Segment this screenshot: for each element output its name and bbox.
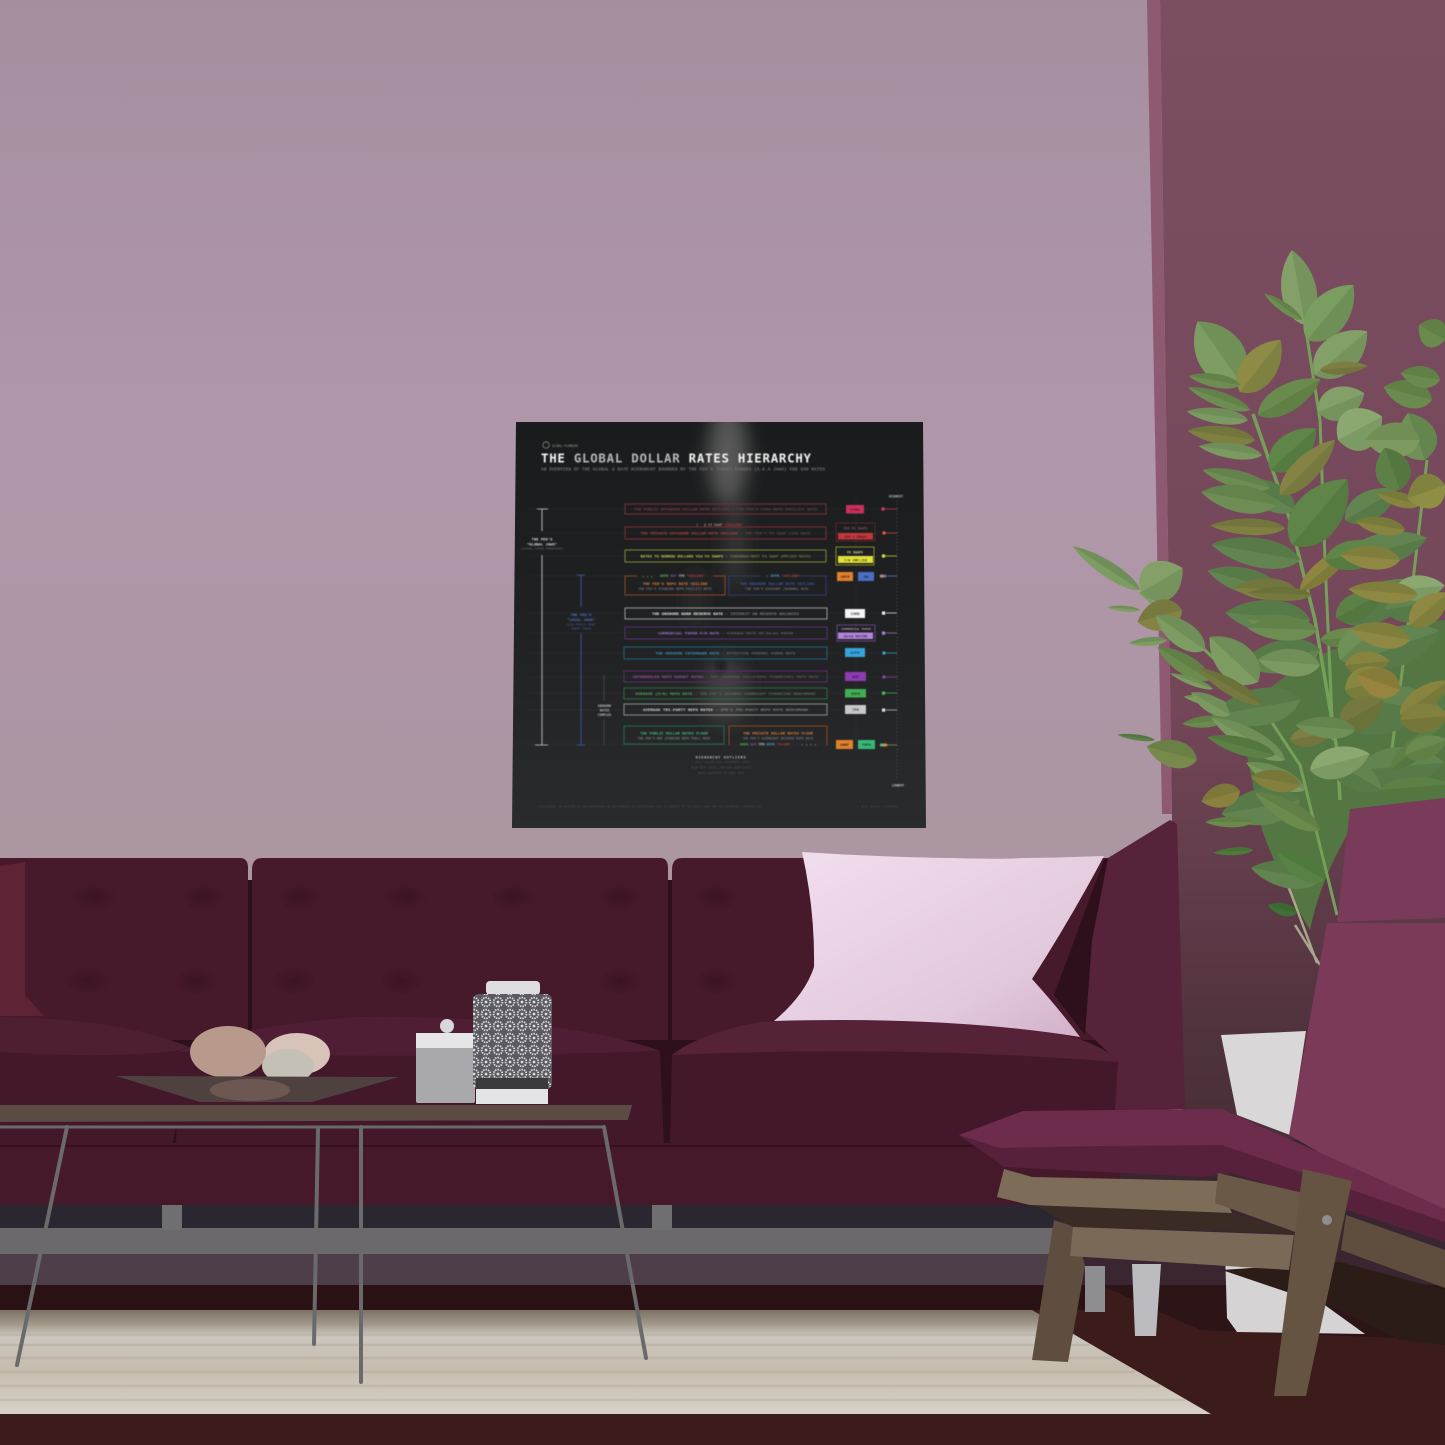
Fed's local jaws bracket: THE FED'S	[570, 613, 592, 618]
lowest marker	[892, 784, 904, 792]
plant: back leaves	[1204, 468, 1445, 893]
title: THE GLOBAL DOLLAR RATES HIERARCHY	[541, 450, 812, 466]
poster smoke	[687, 405, 748, 724]
row: interdealer repo: INTERDEALER REPO MARKET RATES - GCF (GENERAL COLLATERAL FINANCING) REPO RATE	[632, 675, 819, 680]
plant: top cluster leaves	[1178, 247, 1400, 739]
logo: GLOBAL PLUMBING	[552, 444, 578, 448]
chips: ONRP and FRPR: FRPR	[862, 744, 872, 748]
onshore rates complex bracket: RATES	[600, 708, 609, 712]
row: private dollar rates floor: ⇣ ⇣ ⇣ ⇣	[801, 744, 816, 748]
row: private offshore ceiling: $ FX SWAP "CEILING"	[704, 523, 743, 528]
sofa	[0, 820, 1185, 1205]
poster smoke dark spot	[717, 660, 725, 672]
coffee table decor	[116, 981, 552, 1104]
decor: coral balls	[264, 1033, 330, 1075]
row: onshore dollar rate ceiling: THE FED'S DISCOUNT (WINDOW) RATE	[745, 587, 809, 591]
sofa: base	[0, 1143, 1120, 1205]
highest marker	[889, 490, 903, 500]
Fed's global jaws bracket: THE FED'S	[531, 538, 553, 542]
chair: underside shadow	[1035, 1205, 1298, 1233]
poster content	[520, 442, 904, 808]
hierarchy outliers: TERM REPO RATES, PRIVATE REPO RATES	[691, 766, 752, 770]
onshore rates complex bracket: ONSHORE	[598, 704, 611, 708]
row: onshore bank reserve rate	[625, 608, 897, 619]
chips: SRFR and DW: DW	[864, 576, 869, 580]
row: FX swap implied	[625, 547, 897, 565]
decor: small jar	[416, 1019, 475, 1103]
row: public dollar rates floor: THE FED'S RRP (FOREIGN REPO POOL) RATE	[638, 736, 710, 740]
wall edge trim	[1147, 0, 1172, 814]
chair: seat cushion	[959, 1109, 1445, 1242]
hierarchy outliers: HIERARCHY OUTLIERS	[696, 756, 746, 760]
right pink pillow	[774, 852, 1104, 1037]
chips: SRFR and DW	[837, 572, 897, 581]
row: Fed's repo rate ceiling: ⇣ ⇣ ⇣	[642, 576, 653, 580]
chips: ONRP and FRPR: ONRP	[840, 744, 850, 748]
Fed's local jaws bracket: LESS PUBLIC MORE	[567, 624, 596, 626]
row: interdealer repo: GCF	[852, 676, 860, 680]
plant: right branch leaves	[1294, 312, 1445, 800]
row: onshore interbank rate: THE ONSHORE INTERBANK RATE - EFFECTIVE FEDERAL FUNDS RATE	[656, 652, 796, 656]
plant	[1069, 247, 1445, 965]
rug	[0, 1310, 1211, 1414]
Fed's local jaws bracket: SHORT TENOR	[571, 628, 591, 630]
row: FX swap implied: FX SWAPS	[847, 550, 863, 554]
row: FX swap implied: T/N IMPLIED	[844, 558, 867, 564]
floor and skirting	[0, 1140, 1445, 1445]
chair: wooden rails	[997, 1169, 1445, 1288]
row: tri-party repo	[624, 704, 897, 715]
hierarchy outliers: BASIS-ADJUSTED FX SWAP RATE	[698, 772, 745, 775]
chair: backrest	[1289, 923, 1445, 1225]
sofa: tufted buttons	[66, 883, 739, 995]
row: commercial paper	[625, 625, 897, 641]
row: private dollar rates floor	[729, 726, 827, 748]
row: commercial paper: COMMERCIAL PAPER O/N RATE - AVERAGE RATE ON AA/A1 PAPER	[658, 632, 794, 636]
row: private dollar rates floor: THE PRIVATE DOLLAR RATES FLOOR	[743, 732, 814, 736]
poster: The Global Dollar Rates Hierarchy	[512, 405, 926, 828]
row: Fed's repo rate ceiling: THE FED'S REPO RATE CEILING	[643, 582, 708, 587]
highest marker: HIGHEST	[889, 496, 903, 500]
onshore rates complex bracket	[598, 675, 611, 745]
chair: back leg	[1032, 1220, 1085, 1362]
row: private dollar rates floor: SOFR GCF TPR EFFR "FLOOR"	[740, 742, 791, 748]
Fed's global jaws bracket: "GLOBAL JAWS"	[527, 542, 557, 548]
hierarchy outliers: T-BILL YIELDS (SEE DOCUMENT) FIRST	[692, 760, 751, 764]
coffee table	[0, 1105, 646, 1382]
sofa: back cushions	[0, 858, 1108, 1040]
row: Fed's repo rate ceiling: SOFR GCF TPR "CEILING"	[660, 574, 705, 579]
lounge chair	[959, 798, 1445, 1396]
chair: headrest	[1337, 798, 1445, 922]
row: private dollar rates floor: THE FED'S OVERNIGHT REVERSE REPO RATE	[743, 736, 813, 740]
background: lilac wall	[0, 0, 1180, 1000]
row: onshore interbank rate: EFFR	[850, 652, 860, 656]
row: public dollar rates floor	[624, 726, 724, 744]
row: onshore bank reserve rate: THE ONSHORE BANK RESERVE RATE - INTEREST ON RESERVE BALANCES	[652, 613, 800, 617]
sofa leg blocks	[162, 1205, 672, 1230]
white chair legs behind	[1085, 1264, 1161, 1336]
Fed's local jaws bracket: "LOCAL JAWS"	[567, 618, 595, 623]
sofa: seat cushions	[0, 1017, 192, 1146]
footer	[539, 804, 898, 808]
left throw pillow	[0, 862, 44, 1016]
row: public offshore ceiling: THE PUBLIC OFFSHORE DOLLAR RATE CEILING - THE FED'S FIMA REPO FACILITY RATE	[634, 508, 818, 512]
row: tri-party repo: TPR	[852, 709, 860, 713]
row: Fed's repo rate ceiling: THE FED'S STANDING REPO FACILITY RATE	[638, 587, 712, 591]
onshore rates complex bracket: COMPLEX	[598, 713, 611, 717]
row: average repo rate: SOFR	[851, 693, 861, 697]
chips: ONRP and FRPR	[836, 740, 897, 749]
highest marker: ↑	[895, 490, 897, 494]
logo	[543, 442, 578, 448]
footer: DISCLAIMER: AN OUTLINE OF HOW BENCHMARKS IN DOT MARKETS IS INTENTIONAL BUT IS SUBJECT TO THE FED'S JAWS AND THE PLUMBING'S BROADER TAIL	[539, 804, 763, 808]
row: onshore interbank rate	[624, 647, 897, 659]
row: public offshore ceiling	[625, 504, 897, 514]
lowest marker: LOWEST	[892, 784, 904, 788]
decor: glass bowl	[116, 1076, 399, 1102]
Fed's global jaws bracket: (GLOBAL PAPER CONSENSUS)	[520, 546, 564, 550]
subtitle: AN OVERVIEW OF THE GLOBAL $ RATE HIERARCHY BOUNDED BY THE FED'S TARGET RANGES (A.K.A JAWS) FOR USD RATES	[541, 468, 825, 472]
row: Fed's repo rate ceiling	[625, 574, 725, 595]
row: public offshore ceiling: FIMA	[850, 509, 860, 513]
chips: SRFR and DW: SRFR	[840, 576, 850, 580]
row: FX swap implied: RATES TO BORROW DOLLARS VIA FX SWAPS - TOMORROW/NEXT FX SWAP IMPLIED RATES	[640, 554, 811, 560]
Fed's global jaws bracket	[520, 509, 564, 745]
row: average repo rate: AVERAGE (O/N) REPO RATE - THE FED'S SECURED OVERNIGHT FINANCING BENCHMARK	[636, 692, 816, 697]
row: private offshore ceiling: ⇡	[696, 524, 698, 528]
chair: front leg	[1274, 1169, 1352, 1396]
Fed's local jaws bracket	[567, 575, 596, 745]
row: tri-party repo: AVERAGE TRI-PARTY REPO RATES - OFR'S TRI-PARTY REPO RATE BENCHMARK	[643, 708, 809, 713]
row: commercial paper: AA/A2 RATING	[844, 634, 867, 638]
plant pot	[1221, 1031, 1365, 1334]
row: onshore dollar rate ceiling: ⇡	[766, 576, 768, 580]
row: commercial paper: COMMERCIAL PAPER	[841, 627, 871, 631]
row: onshore dollar rate ceiling	[729, 574, 826, 595]
row: private offshore ceiling: THE PRIVATE OFFSHORE DOLLAR RATE CEILING - THE FED'S FX SWAP LINE RATE	[640, 532, 811, 536]
poster background	[512, 422, 926, 828]
footer: © 2023 GLOBAL PLUMBING	[857, 804, 898, 808]
row: onshore dollar rate ceiling: EFFR "CEILING"	[771, 574, 800, 579]
background: dark mauve side wall	[1160, 0, 1445, 1300]
hierarchy outliers	[691, 756, 752, 775]
sofa: right arm	[1085, 820, 1185, 1111]
row: onshore dollar rate ceiling: THE ONSHORE DOLLAR RATE CEILING	[740, 583, 815, 587]
chair: shadow frame	[1222, 1262, 1445, 1345]
row: interdealer repo	[624, 671, 897, 682]
row: onshore bank reserve rate: IORB	[850, 613, 860, 617]
row: private offshore ceiling	[625, 523, 897, 541]
row: private offshore ceiling: OIS + 25bps	[845, 535, 866, 539]
plant: left branch leaves	[1069, 540, 1374, 919]
row: average repo rate	[624, 688, 897, 699]
lowest marker: ↓	[897, 789, 899, 792]
row: public dollar rates floor: THE PUBLIC DOLLAR RATES FLOOR	[640, 732, 709, 736]
decor: large patterned jar	[473, 981, 552, 1104]
row: private offshore ceiling: FED FX SWAPS	[844, 526, 867, 530]
